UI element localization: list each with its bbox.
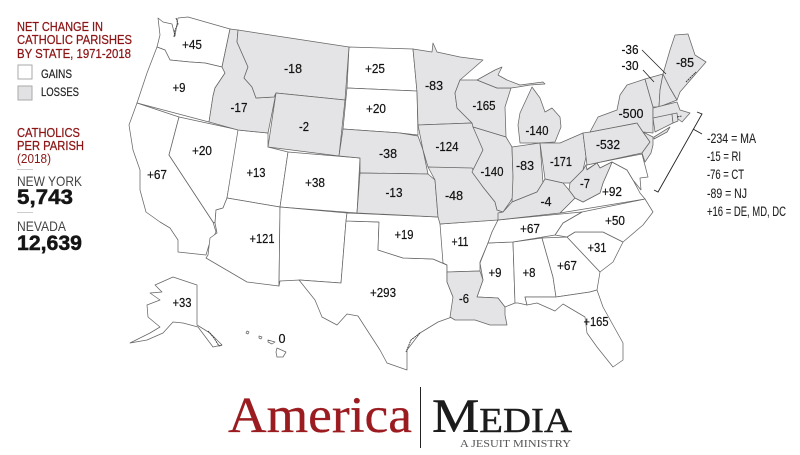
state: Missouri — [428, 167, 503, 224]
state value labels: -500 — [618, 106, 644, 121]
state: Montana — [237, 30, 349, 100]
state value labels: +9 — [488, 265, 502, 280]
state value labels: -30 — [622, 58, 638, 73]
state value labels: +19 — [394, 227, 414, 242]
state: Utah — [227, 130, 288, 207]
list of small state values: -234 = MA — [707, 131, 756, 146]
state: Iowa — [418, 123, 483, 172]
stat: New York: NEW YORK — [17, 173, 83, 189]
state value labels: +165 — [584, 314, 608, 329]
state: Virginia — [560, 162, 645, 213]
logo: America Media — [228, 387, 573, 450]
state value labels: +50 — [605, 213, 625, 228]
bracket for small northeastern states — [654, 112, 702, 192]
state value labels: 0 — [278, 331, 286, 346]
state: Georgia — [542, 237, 600, 297]
state value labels: -532 — [596, 137, 620, 152]
state value labels: +8 — [522, 265, 536, 280]
state value labels: -124 — [436, 139, 458, 154]
state value labels: -6 — [459, 291, 469, 306]
list of small state values — [707, 131, 786, 219]
state value labels: -17 — [230, 100, 248, 115]
state: Massachusetts — [653, 102, 690, 122]
states with gains — [129, 17, 653, 370]
state: Ohio — [540, 133, 586, 183]
state: Colorado — [280, 152, 360, 213]
state: New Mexico — [279, 207, 347, 286]
state: Oklahoma — [346, 213, 447, 265]
Hawaiian islands — [246, 331, 249, 334]
state: Minnesota — [413, 43, 483, 125]
state value labels: +45 — [182, 37, 202, 52]
stat: Nevada — [17, 212, 82, 255]
state value labels: +92 — [602, 184, 622, 199]
state value labels: +293 — [370, 285, 396, 300]
heading: Catholics per parish: (2018) — [17, 151, 51, 166]
state: Wisconsin — [455, 80, 511, 137]
state value labels: -171 — [550, 154, 572, 169]
state value labels: -140 — [480, 164, 504, 179]
state: Florida — [525, 290, 623, 367]
map of the United States — [129, 17, 706, 370]
legend label: gains: GAINS — [41, 67, 72, 81]
state: Illinois — [472, 127, 513, 212]
stat: Nevada: NEVADA — [17, 218, 67, 234]
leader line: Vermont — [642, 50, 666, 74]
state: Hawaii — [276, 348, 286, 357]
state: West Virginia — [569, 162, 612, 202]
dense coastline details — [174, 18, 696, 352]
stat: Nevada: 12,639 — [17, 232, 82, 255]
state value labels: +9 — [172, 80, 186, 95]
heading: Catholics per parish: PER PARISH — [17, 138, 84, 153]
state value labels: -48 — [445, 188, 463, 203]
Hawaiian island — [259, 336, 262, 339]
state value labels: +67 — [557, 258, 577, 273]
state value labels: +38 — [305, 175, 325, 190]
state: South Dakota — [343, 88, 418, 135]
logo: America Media: MEDIA — [432, 390, 573, 443]
state value labels: +33 — [172, 295, 192, 310]
state value labels: -36 — [622, 42, 638, 57]
state: Louisiana — [447, 271, 507, 325]
state: Arkansas — [440, 220, 498, 272]
Hawaiian island — [268, 340, 275, 344]
state value labels: +31 — [588, 240, 606, 255]
state: Vermont — [645, 74, 663, 107]
state: North Carolina — [555, 199, 653, 242]
state: California — [129, 103, 216, 255]
state: Nevada — [169, 117, 239, 223]
state: North Dakota — [347, 47, 417, 91]
state: Michigan upper peninsula — [477, 67, 545, 88]
state: Alabama — [513, 238, 556, 305]
state value labels: +25 — [365, 61, 385, 76]
state value labels: +20 — [366, 101, 386, 116]
leader line: New Hampshire — [643, 70, 654, 82]
state: Connecticut — [653, 114, 673, 132]
state value labels: -2 — [299, 119, 309, 134]
state value labels: -18 — [284, 61, 302, 76]
heading: net change in Catholic parishes: NET CHANGE IN — [17, 19, 103, 34]
state: Rhode Island — [672, 113, 678, 123]
state: Wyoming — [268, 93, 345, 156]
state: Kentucky — [498, 179, 575, 220]
state: Nebraska — [339, 129, 428, 174]
state: Texas — [299, 221, 453, 370]
state value labels: +13 — [246, 165, 266, 180]
heading: net change in Catholic parishes — [17, 19, 132, 61]
state: Alaska — [130, 277, 222, 347]
state value labels: -7 — [580, 176, 590, 191]
heading: Catholics per parish: CATHOLICS — [17, 125, 80, 140]
state value labels: -85 — [676, 55, 694, 70]
state value labels: +20 — [192, 143, 212, 158]
state value labels: +121 — [250, 231, 274, 246]
state value labels: -4 — [540, 194, 552, 209]
legend swatch: losses — [18, 86, 32, 100]
state value labels: -13 — [386, 185, 402, 200]
list of small state values: -76 = CT — [707, 167, 744, 182]
logo: America Media: A JESUIT MINISTRY — [460, 439, 571, 450]
logo: America Media: America — [228, 388, 412, 444]
stat: New York — [17, 170, 83, 209]
state: Kansas — [357, 173, 438, 217]
state: New Jersey — [642, 132, 653, 162]
state: Pennsylvania — [583, 123, 650, 165]
state: Mississippi — [477, 242, 515, 307]
state: South Carolina — [567, 232, 623, 272]
state value labels: -140 — [526, 123, 548, 138]
states with losses — [209, 29, 706, 325]
list of small state values: -15 = RI — [707, 149, 741, 164]
legend swatch: gains — [18, 65, 32, 79]
state: Indiana — [512, 143, 543, 202]
state value labels — [147, 37, 694, 346]
state: Idaho — [209, 29, 276, 133]
heading: net change in Catholic parishes: CATHOLIC PARISHES — [17, 32, 132, 47]
heading: Catholics per parish — [17, 125, 84, 166]
list of small state values: -89 = NJ — [707, 186, 747, 201]
state value labels: -165 — [472, 98, 496, 113]
state value labels: +67 — [520, 221, 540, 236]
state: Long Island — [654, 127, 670, 139]
state: Oregon — [137, 47, 225, 122]
state value labels: -83 — [425, 78, 443, 93]
state value labels: +67 — [147, 167, 167, 182]
state: Michigan lower peninsula — [518, 87, 561, 143]
state: Arizona — [206, 198, 280, 286]
state: Washington — [157, 17, 230, 67]
heading: net change in Catholic parishes: BY STATE, 1971-2018 — [17, 46, 131, 61]
state value labels: -38 — [379, 146, 397, 161]
stat: New York: 5,743 — [17, 186, 73, 209]
state: New Hampshire — [659, 74, 677, 107]
legend — [18, 65, 79, 100]
state: Tennessee — [488, 212, 582, 243]
state value labels: -83 — [516, 158, 534, 173]
state value labels: +11 — [452, 234, 468, 249]
state: Maryland, Delaware, DC — [586, 154, 648, 190]
legend label: losses: LOSSES — [41, 85, 79, 99]
state: New York — [590, 79, 653, 133]
state: Maine — [663, 34, 706, 100]
